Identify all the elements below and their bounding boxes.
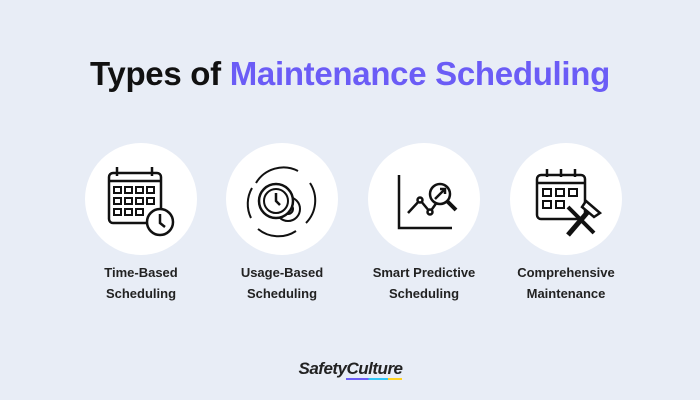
logo: SafetyCulture: [298, 359, 403, 378]
icon: predictive chart: [368, 143, 480, 255]
label: smart predictive: [373, 265, 475, 301]
label: usage-based: [241, 265, 323, 301]
label: usage-based: Usage-Based: [241, 265, 323, 280]
icon: calendar clock: [85, 143, 197, 255]
label: smart predictive: Scheduling: [389, 286, 459, 301]
label: time-based: Scheduling: [106, 286, 176, 301]
label: smart predictive: Smart Predictive: [373, 265, 475, 280]
icon: calendar tools: [510, 143, 622, 255]
title: Types of Maintenance Scheduling: [90, 55, 610, 92]
label: comprehensive maintenance: [517, 265, 615, 301]
label: time-based: [104, 265, 178, 301]
icon: gauge gear cycle: [226, 143, 338, 255]
label: time-based: Time-Based: [104, 265, 178, 280]
label: usage-based: Scheduling: [247, 286, 317, 301]
label: comprehensive maintenance: Comprehensive: [517, 265, 615, 280]
label: comprehensive maintenance: Maintenance: [527, 286, 605, 301]
